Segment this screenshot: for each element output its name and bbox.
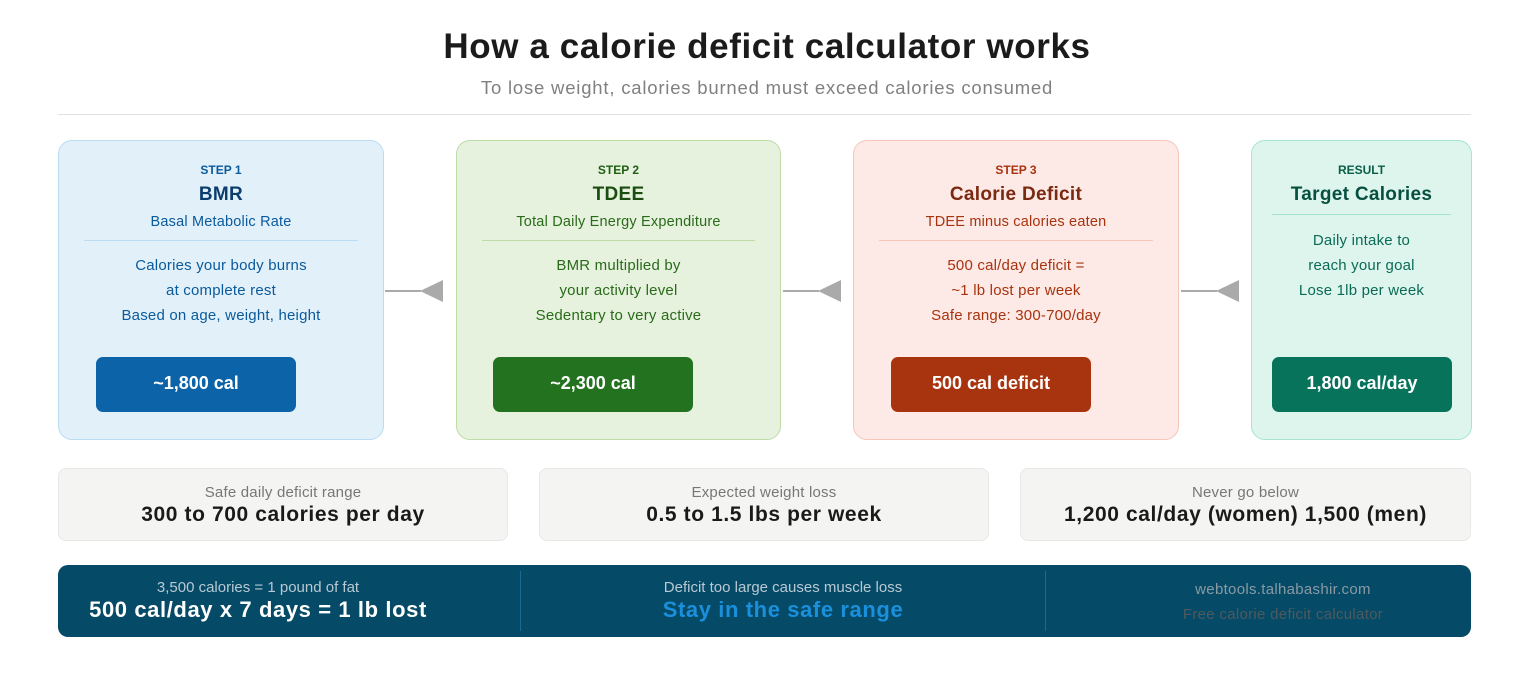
stat: minimum: 1,200 cal/day (women) 1,500 (men): [1064, 503, 1427, 526]
description: reach your goal: [1308, 257, 1415, 274]
title: How a calorie deficit calculator works: [443, 27, 1091, 66]
banner: warning: Deficit too large causes muscle loss: [664, 579, 902, 596]
step label: STEP 2: [598, 163, 639, 177]
description: Lose 1lb per week: [1299, 282, 1424, 299]
description: [121, 257, 321, 324]
step label: STEP 3: [995, 163, 1037, 177]
heading: Calorie Deficit: [950, 184, 1082, 205]
heading: Target Calories: [1291, 184, 1432, 205]
panel: step 3 calorie deficit: [853, 140, 1179, 440]
heading: TDEE: [593, 184, 644, 205]
stat: expected loss: 0.5 to 1.5 lbs per week: [646, 503, 882, 526]
stat: safe range: [58, 468, 508, 541]
value button: 500 cal deficit: [932, 373, 1050, 393]
value button: 1,800 cal/day: [1306, 373, 1418, 393]
description: Safe range: 300-700/day: [931, 307, 1101, 324]
description: Sedentary to very active: [536, 307, 701, 324]
bottom banner: [58, 565, 1471, 637]
description: BMR multiplied by: [556, 257, 681, 274]
banner: source: webtools.talhabashir.com: [1195, 581, 1371, 598]
arrow 2: [783, 280, 841, 302]
subtitle: To lose weight, calories burned must exceed calories consumed: [481, 77, 1053, 98]
panel: step 1 BMR: [58, 140, 384, 440]
description: Daily intake to: [1313, 232, 1410, 249]
description: ~1 lb lost per week: [951, 282, 1081, 299]
banner: source: Free calorie deficit calculator: [1183, 606, 1383, 623]
description: [1299, 232, 1424, 299]
value button: [1272, 357, 1452, 412]
panel: step 2 TDEE: [456, 140, 781, 440]
arrow 1: [385, 280, 443, 302]
subheading: TDEE minus calories eaten: [926, 214, 1106, 230]
stat: safe range: 300 to 700 calories per day: [141, 503, 425, 526]
stat: safe range: Safe daily deficit range: [205, 484, 361, 501]
banner: source: [1183, 581, 1383, 623]
banner: warning: [663, 579, 903, 622]
value button: [891, 357, 1091, 412]
value button: ~2,300 cal: [550, 373, 636, 393]
banner: formula: 3,500 calories = 1 pound of fat: [157, 579, 359, 596]
description: at complete rest: [166, 282, 276, 299]
description: Calories your body burns: [135, 257, 307, 274]
stat: expected loss: [539, 468, 989, 541]
description: 500 cal/day deficit =: [947, 257, 1085, 274]
value button: [493, 357, 693, 412]
description: [536, 257, 701, 324]
subheading: Basal Metabolic Rate: [150, 214, 292, 230]
panel: result: [1251, 140, 1472, 440]
step label: STEP 1: [200, 163, 242, 177]
value button: ~1,800 cal: [153, 373, 239, 393]
description: [931, 257, 1101, 324]
banner: formula: 500 cal/day x 7 days = 1 lb lost: [89, 597, 427, 622]
stat: minimum: [1020, 468, 1471, 541]
banner: warning: Stay in the safe range: [663, 597, 903, 622]
result label: RESULT: [1338, 163, 1385, 177]
heading: BMR: [199, 184, 243, 205]
stat: minimum: Never go below: [1192, 484, 1299, 501]
value button: [96, 357, 296, 412]
stat: expected loss: Expected weight loss: [692, 484, 836, 501]
description: Based on age, weight, height: [121, 307, 321, 324]
description: your activity level: [559, 282, 678, 299]
arrow 3: [1181, 280, 1239, 302]
banner: formula: [89, 579, 427, 622]
subheading: Total Daily Energy Expenditure: [516, 214, 721, 230]
